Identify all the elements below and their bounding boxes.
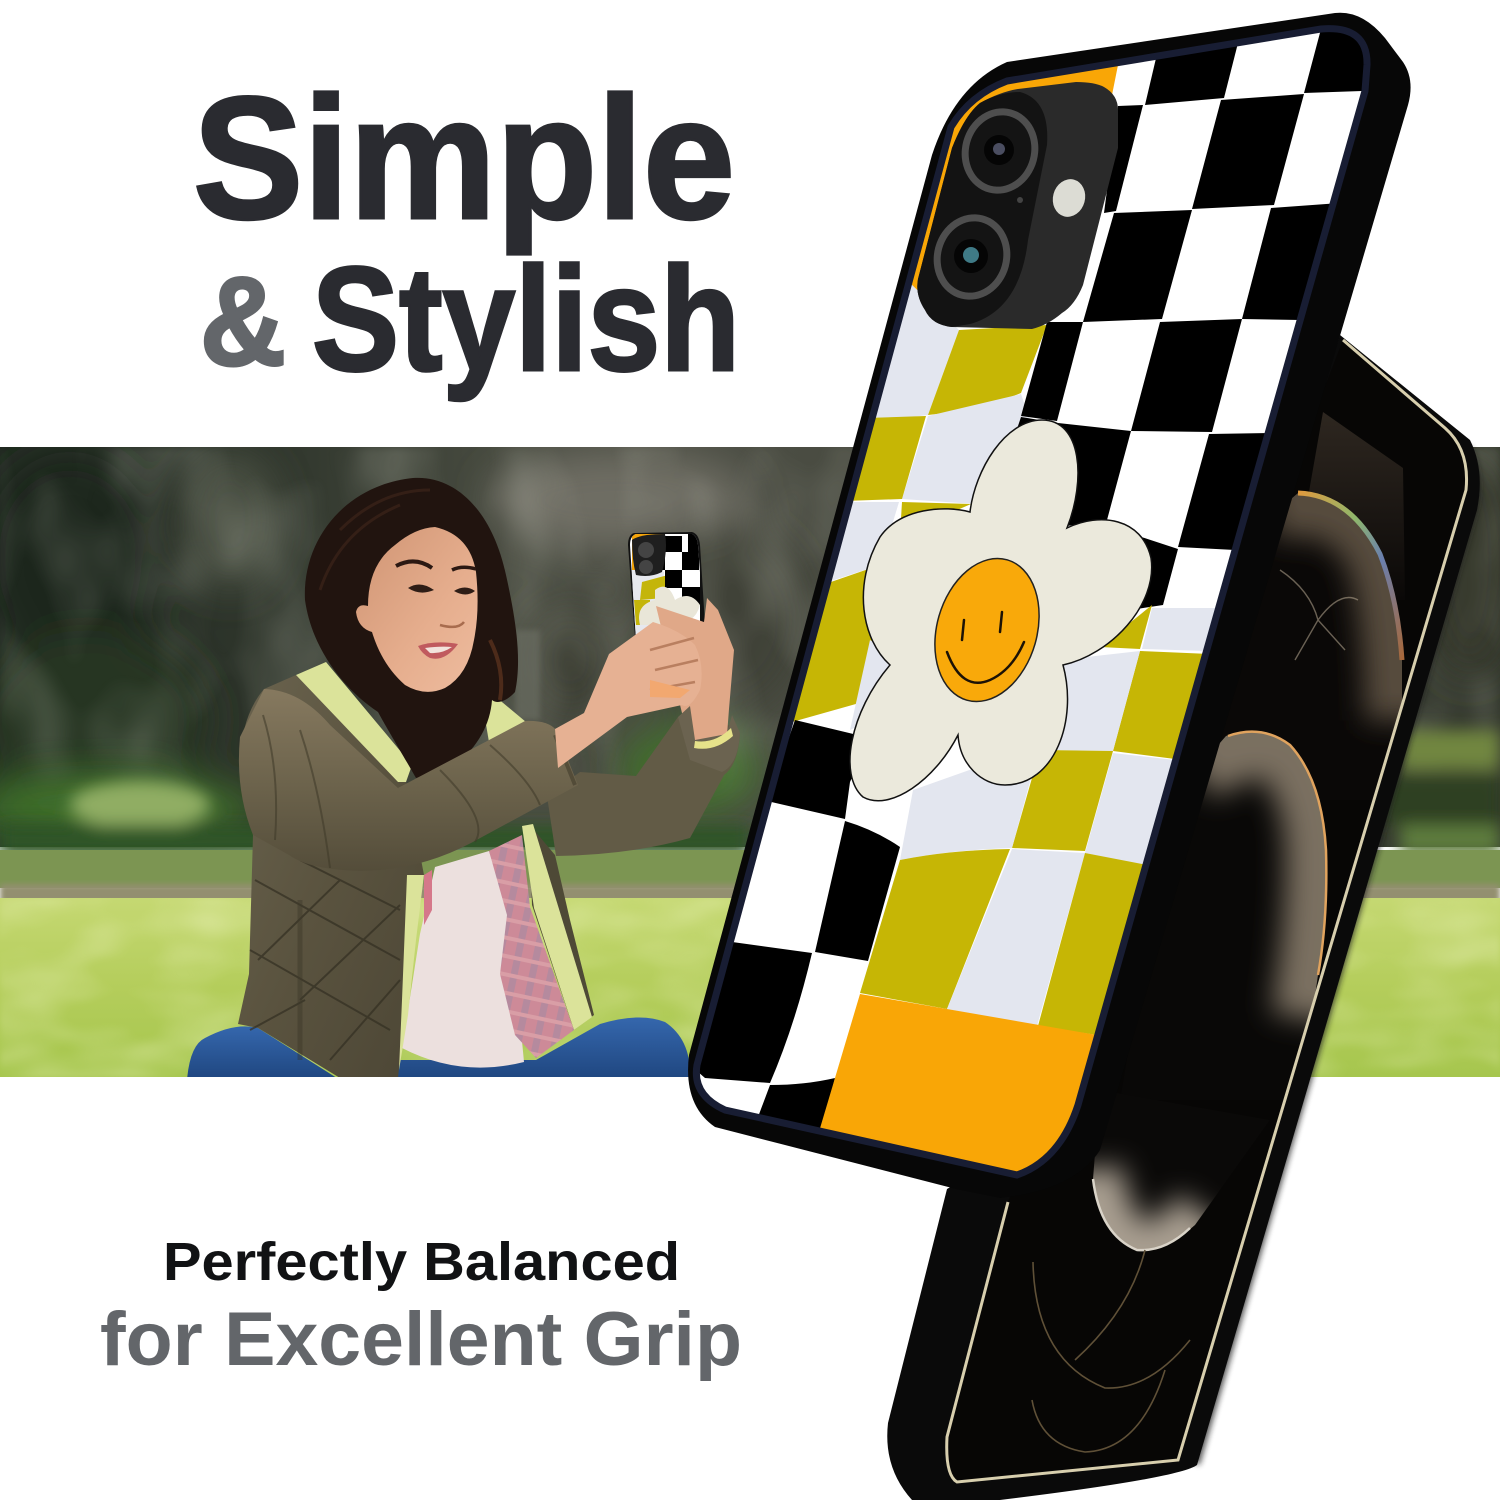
jacket body (238, 675, 424, 1078)
orange bottom block (820, 994, 1094, 1172)
mini phone in hands (628, 532, 704, 636)
tagline: Perfectly Balanced for Excellent Grip (100, 1232, 742, 1382)
upper dome flare (1280, 570, 1358, 660)
grass texture (0, 898, 1500, 1078)
far sleeve (547, 714, 740, 856)
wallpaper thin curves (1032, 1250, 1190, 1452)
smiley face (919, 546, 1055, 714)
ampersand: & (200, 251, 286, 392)
forest texture (0, 447, 1500, 807)
tagline line one: Perfectly Balanced (163, 1232, 680, 1292)
back phone wallpaper (1031, 412, 1404, 1453)
case pattern (690, 20, 1380, 1200)
camera island (917, 82, 1118, 329)
case inner rim (696, 29, 1367, 1175)
bottom glow blob (1093, 1144, 1217, 1249)
bottom blob rim (1093, 1179, 1190, 1250)
jeans (187, 1017, 690, 1080)
heading line one: Simple (193, 60, 735, 255)
heading line two: Stylish (312, 237, 740, 402)
back phone soft shadow (1185, 445, 1480, 1465)
tagline line two: for Excellent Grip (100, 1297, 742, 1382)
photo band: park background (0, 440, 1500, 1078)
hair (305, 478, 518, 778)
lower dome (1201, 732, 1326, 1040)
woman taking a selfie (187, 478, 740, 1080)
upper dome rainbow rim (1298, 493, 1402, 660)
jacket quilting (250, 860, 400, 1060)
front phone case (688, 13, 1411, 1200)
neck (391, 680, 440, 740)
upper dome (1276, 493, 1402, 740)
lower left checker (690, 720, 900, 1131)
plaid overshirt (424, 835, 574, 1058)
right jacket panel (529, 824, 594, 1030)
hands (555, 598, 734, 768)
dark lens recess (917, 92, 1047, 327)
lower right checker (860, 605, 1217, 1035)
orange top corner (900, 60, 1119, 290)
petals (850, 420, 1152, 801)
flash (1049, 176, 1089, 220)
shirt (402, 851, 524, 1068)
smile and eyes (947, 612, 1024, 683)
lime jacket lining (296, 662, 592, 1070)
lower dome rim (1228, 732, 1326, 975)
lower lens (924, 206, 1020, 308)
case body with thick side wall (688, 13, 1411, 1198)
back phone gold frame (947, 340, 1467, 1482)
daisy smiley flower (850, 420, 1152, 801)
black and white checker, upper (1018, 32, 1366, 608)
upper lens (952, 100, 1048, 202)
back phone black case (887, 335, 1480, 1500)
title: Simple & Stylish (193, 60, 740, 402)
near sleeve (239, 689, 578, 871)
light and olive waves (792, 282, 1047, 730)
notch area glow (1309, 412, 1404, 574)
back phone: iPhone screen (887, 330, 1480, 1500)
far cuff and bracelet (678, 706, 740, 772)
face (356, 527, 478, 692)
